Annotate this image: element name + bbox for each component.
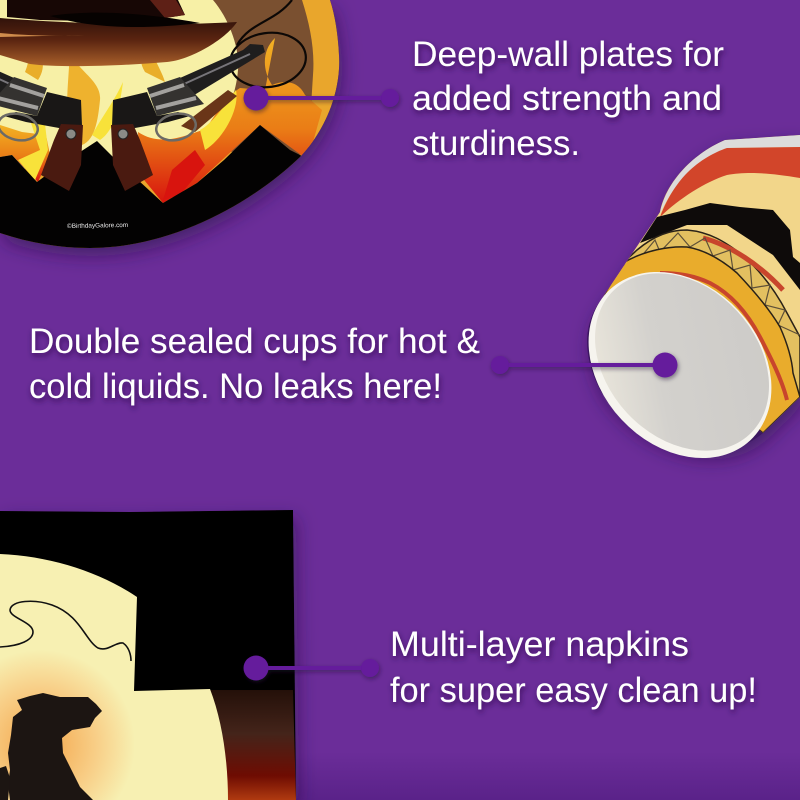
revolver right	[111, 44, 265, 191]
horse silhouette	[8, 693, 102, 800]
ground silhouette	[0, 125, 302, 248]
connector: plate	[244, 86, 399, 110]
connector: cup	[491, 352, 678, 378]
cup shadow	[587, 135, 800, 452]
text: plates: Deep-wall plates for	[412, 35, 724, 74]
hat	[0, 0, 237, 66]
band: yellow pattern	[623, 230, 800, 400]
plate inner field	[213, 0, 314, 155]
band: red	[660, 147, 800, 217]
gun handle	[181, 90, 237, 132]
moon	[0, 0, 238, 170]
panel: napkin	[0, 510, 296, 800]
lip	[660, 135, 800, 214]
panel: cup	[582, 135, 800, 468]
plate artwork	[0, 0, 345, 260]
text: plates: added strength and	[412, 79, 722, 118]
lasso	[230, 0, 307, 88]
cup base	[560, 238, 800, 486]
text: plates: sturdiness.	[412, 124, 580, 163]
text: napkins	[390, 625, 757, 710]
text: cups: Double sealed cups for hot &	[29, 322, 480, 361]
napkin black ground	[0, 510, 296, 800]
band: red stripe	[703, 238, 783, 290]
text: cups: cold liquids. No leaks here!	[29, 367, 442, 406]
napkin moon	[0, 554, 228, 800]
band: orange	[603, 247, 800, 433]
text: napkins: Multi-layer napkins	[390, 625, 689, 664]
flames	[0, 37, 322, 203]
second silhouette	[0, 766, 10, 800]
band: black silhouette	[640, 203, 800, 290]
revolver left	[0, 72, 83, 191]
text: napkins: for super easy clean up!	[390, 671, 757, 710]
lasso line	[0, 601, 131, 661]
cup base rim	[551, 235, 800, 495]
zigzag	[640, 233, 800, 335]
text: cups	[29, 322, 480, 406]
text: plates	[412, 35, 724, 163]
copyright: ©BirthdayGalore.com	[67, 221, 128, 230]
band: red arc	[660, 273, 787, 400]
moon glow	[0, 650, 135, 800]
connector: napkin	[244, 656, 379, 680]
panel: plate	[0, 0, 345, 260]
plate shadow	[0, 0, 339, 248]
cup body	[603, 135, 800, 433]
napkin band	[210, 690, 296, 800]
